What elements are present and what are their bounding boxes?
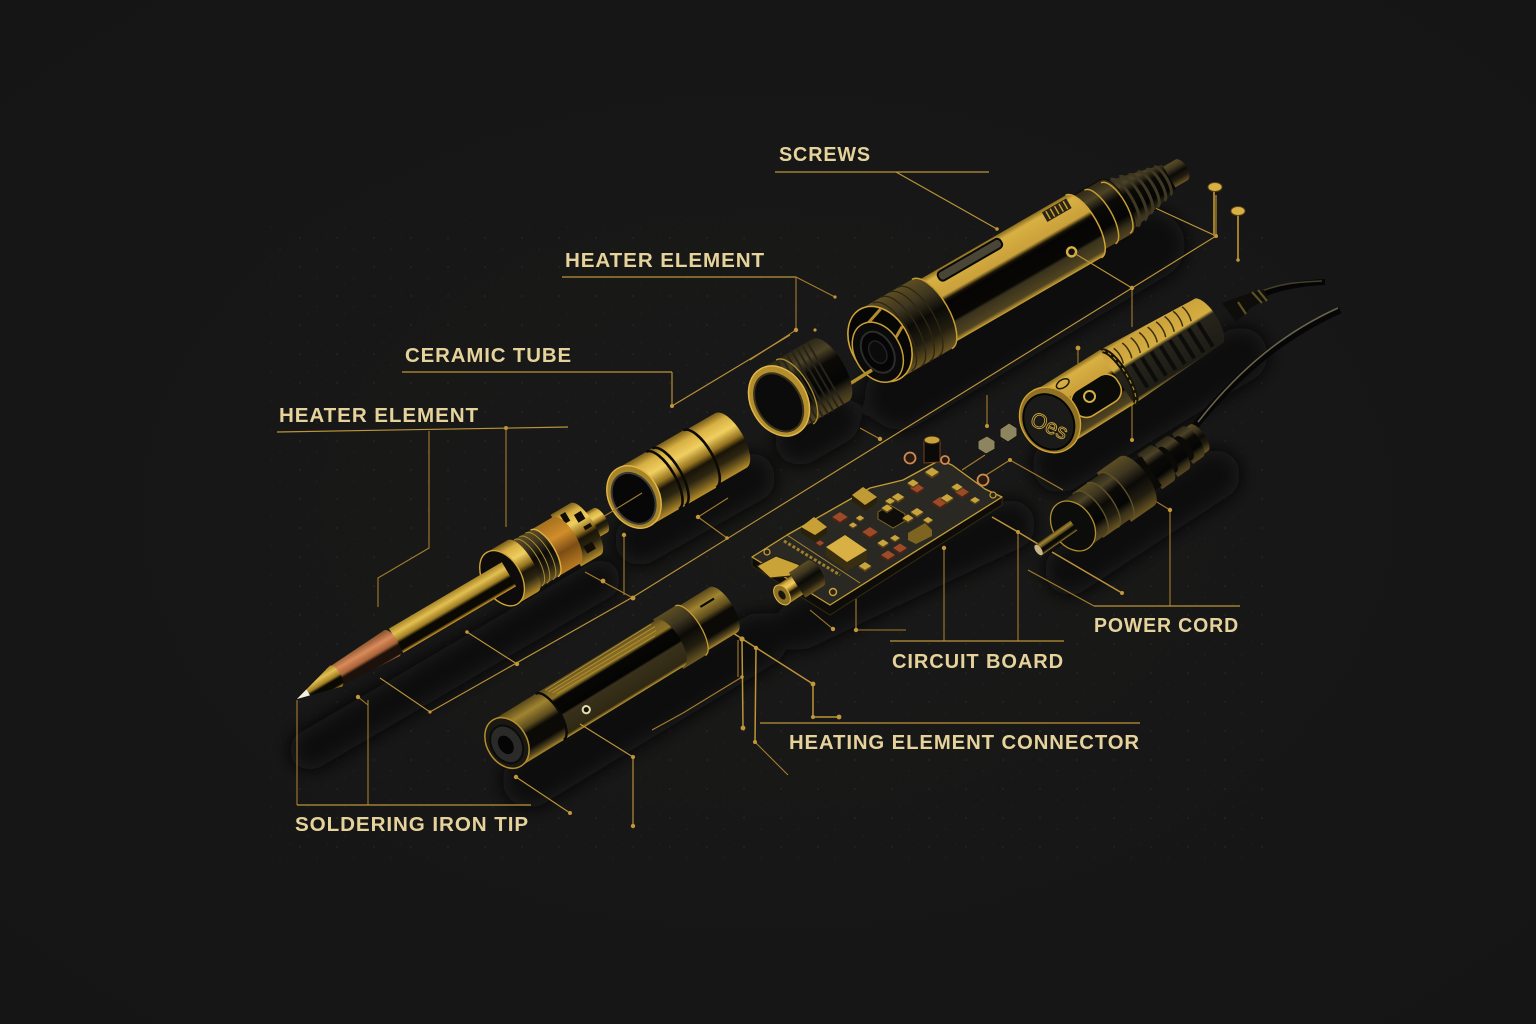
part: lower handle: [475, 580, 747, 778]
connector pin: [1033, 521, 1077, 557]
label: heater element (lower): [277, 404, 568, 432]
corner mounting rings: [904, 452, 988, 486]
label: ceramic tube: CERAMIC TUBE: [405, 344, 572, 367]
rear knob: [508, 491, 621, 592]
label: heater element (upper): HEATER ELEMENT: [565, 249, 765, 272]
collar: [470, 535, 547, 614]
part: screws: [1208, 182, 1245, 262]
handle face: [1007, 376, 1093, 464]
body tail and strain relief: [1066, 139, 1202, 254]
label: heating element connector: HEATING ELEMENT CONNECTOR: [789, 731, 1140, 754]
cast shadows: [310, 245, 1240, 780]
connector port ring: [581, 705, 591, 715]
part: small cubes: [978, 423, 1017, 454]
body front collar: [835, 271, 967, 393]
copper section: [324, 627, 405, 692]
connector face: [1041, 492, 1105, 560]
part: soldering iron tip assembly: [282, 491, 621, 725]
part: power cord connector: [1019, 308, 1340, 576]
cone tip: [291, 663, 346, 709]
label: circuit board: CIRCUIT BOARD: [892, 650, 1064, 673]
board connector: [757, 556, 829, 611]
label: power cord: POWER CORD: [1094, 614, 1239, 637]
capacitor: [924, 436, 940, 463]
cable: [1222, 281, 1325, 322]
board silkscreen strip: [784, 535, 860, 583]
board surface: [752, 460, 1002, 605]
label: soldering iron tip: SOLDERING IRON TIP: [295, 813, 529, 836]
part: knurled cap: [736, 332, 862, 447]
handle face logo: Oes: [1027, 408, 1071, 445]
cord: [1190, 308, 1340, 432]
label: screws: SCREWS: [779, 143, 871, 166]
board underside: [752, 497, 1002, 615]
small components: [764, 468, 996, 596]
large chips: [801, 487, 932, 571]
leader lines: [297, 172, 1216, 826]
part: circuit board: [752, 436, 1002, 615]
body barrel: [911, 188, 1114, 347]
bellows: [1059, 410, 1221, 548]
leader overlays across parts: [580, 253, 1132, 757]
leader dots: [356, 227, 1218, 828]
part: ceramic tube: [596, 406, 759, 538]
part: upper right handle with cable: [1007, 281, 1325, 464]
label: heater element (lower): HEATER ELEMENT: [279, 404, 479, 427]
shaft: [389, 562, 516, 653]
part: connecting rod: [843, 370, 872, 388]
part: main handle body: [835, 132, 1207, 393]
handle grip: [1033, 288, 1233, 446]
